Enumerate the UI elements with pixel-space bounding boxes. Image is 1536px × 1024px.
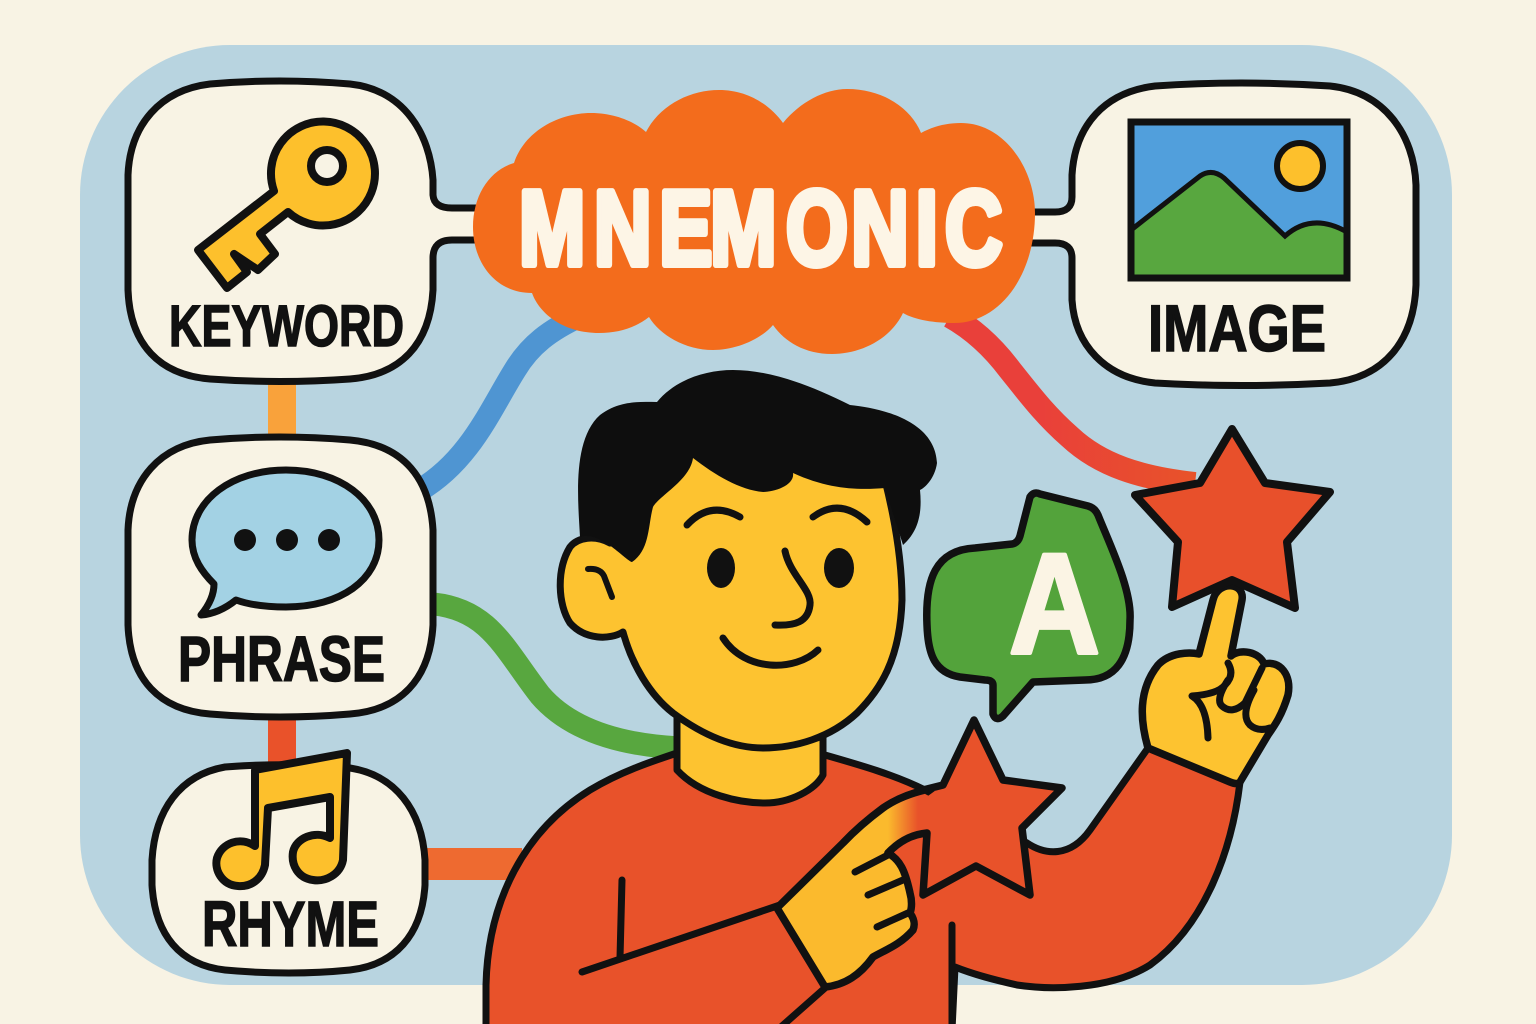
icon: key (198, 122, 375, 288)
label: keyword: KEYWORD (169, 294, 404, 359)
label: image: IMAGE (1148, 291, 1326, 365)
panel: rhyme (152, 753, 425, 973)
finger lines (1192, 663, 1270, 738)
star fill: small (887, 720, 1062, 895)
icon: music notes (216, 753, 347, 886)
hand outline (777, 790, 925, 987)
hand fill: fading fingertip (875, 790, 927, 860)
arm lines (582, 880, 952, 1024)
title: MNEMONIC (519, 168, 1002, 287)
label: rhyme: RHYME (202, 888, 379, 960)
icon: speech bubble (192, 470, 379, 615)
star: large red (1135, 429, 1330, 608)
connectors (268, 316, 1195, 880)
connector: keyword to phrase (268, 378, 296, 442)
connector: phrase to person (434, 604, 680, 748)
speech bubble: letter A (927, 493, 1130, 719)
hand: pointing up (1142, 586, 1289, 784)
panel: image (1020, 83, 1416, 386)
head and ear (560, 430, 902, 748)
hair (578, 370, 937, 562)
connector: mnemonic to star (950, 316, 1195, 484)
letter A: A (1009, 525, 1100, 684)
connector: phrase to rhyme (268, 712, 296, 770)
box (128, 437, 433, 717)
star outline (888, 720, 1062, 895)
cloud: mnemonic (473, 89, 1035, 354)
left eye (707, 548, 735, 588)
eyebrows (687, 508, 867, 525)
body (486, 748, 1240, 1024)
hand fill: palm (777, 808, 914, 987)
box with neck to cloud (1020, 83, 1416, 386)
connector: rhyme to person (422, 848, 522, 880)
star and pointing hand (777, 720, 1062, 987)
bubble (927, 493, 1130, 719)
box with neck to cloud (128, 81, 490, 382)
right eye (824, 548, 854, 588)
hand shape (1142, 586, 1289, 784)
mouth (723, 638, 818, 665)
cloud shape (473, 89, 1035, 354)
box (152, 765, 425, 973)
label: phrase: PHRASE (178, 623, 385, 695)
ear detail (588, 569, 612, 597)
icon: picture (1131, 122, 1347, 278)
nose (775, 551, 810, 625)
finger lines (855, 855, 908, 927)
panel: phrase (128, 437, 433, 717)
panel: keyword (128, 81, 490, 382)
connector: phrase to mnemonic (420, 316, 580, 490)
person (486, 370, 1240, 1024)
neck (677, 715, 823, 803)
